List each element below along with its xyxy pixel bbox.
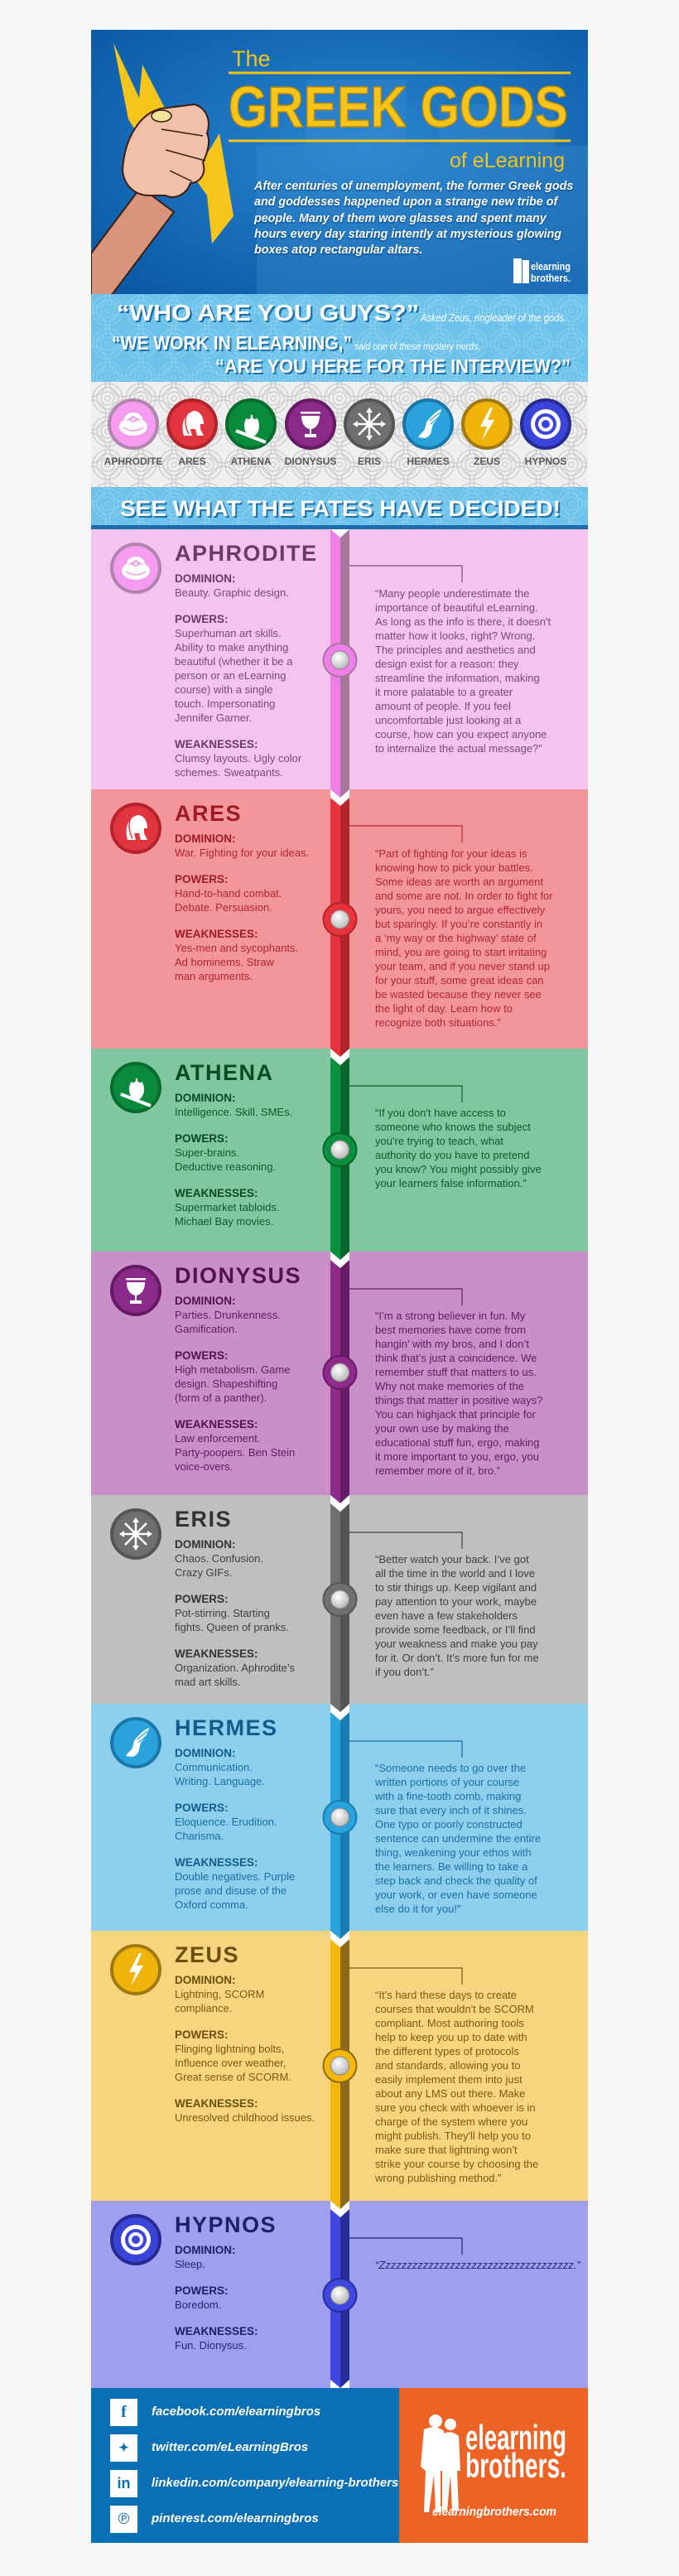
panel: hypnos [91,2201,588,2388]
text: linkedin: linkedin.com/company/elearning-brothers [152,2476,398,2490]
quote: dionysus: hangin’ with my bros, and I don’t [375,1338,529,1350]
quote: ares: be wasted because they never see [375,988,542,1001]
text: aphrodite stats: Ability to make anything [175,641,288,654]
text: eris stats: fights. Queen of pranks. [175,1621,289,1633]
text: ares stats: Yes-men and sycophants. [175,942,298,954]
icon: chaos star [110,1508,161,1560]
text: hypnos stats: Fun. Dionysus. [175,2339,247,2352]
quote: hermes: sentence can undermine the entire [375,1832,541,1845]
text: ares stats: man arguments. [175,970,253,982]
quote: athena [375,1107,542,1189]
text: hypnos stats: Sleep. [175,2258,205,2270]
panel: icon row: ERIS [358,456,381,467]
quote: eris [375,1553,539,1678]
quote: hermes: “Someone needs to go over the [375,1762,526,1774]
text: zeus stats: Influence over weather, [175,2057,286,2069]
icon: pinterest: ℗ [118,2511,129,2528]
quote: ares: and some are not. In order to fight for [375,890,553,902]
text: hermes stats: Charisma. [175,1830,224,1842]
quote: zeus: easily implement them into just [375,2073,522,2086]
text: hypnos stats: DOMINION: [175,2244,235,2256]
text: dionysus stats [175,1295,295,1473]
quote: dionysus: Why not make memories of the [375,1380,524,1392]
text: zeus stats [175,1974,315,2124]
intro text: boxes atop rectangular altars. [254,244,422,257]
quote: aphrodite: uncomfortable just looking at a [375,714,521,726]
quote: zeus [375,1989,538,2184]
text: eris stats: Chaos. Confusion. [175,1552,263,1565]
icon: owl [110,1062,161,1113]
header [91,30,588,294]
panel: eris [91,1495,588,1704]
icon: facebook: f [121,2403,127,2421]
quote: ares [375,847,553,1029]
quote: zeus: wrong publishing method.” [375,2172,501,2184]
icon: linkedin: in [118,2475,131,2492]
quote: ares: for your stuff, some great ideas can [375,974,544,987]
quote: aphrodite: matter how it looks, right? Wrong. [375,630,535,642]
quote: athena: you're trying to teach, what [375,1135,503,1147]
dionysus bar [323,1260,462,1503]
text: aphrodite stats: Beauty. Graphic design. [175,586,289,599]
footer: social links [91,2388,399,2543]
quote: zeus: compliant. Most authoring tools [375,2017,524,2029]
quote: hypnos: “Zzzzzzzzzzzzzzzzzzzzzzzzzzzzzzzzzzzz.” [375,2259,580,2271]
panel: icon row [91,382,588,487]
text: aphrodite stats: POWERS: [175,613,229,625]
quote: hermes: your work, or even have someone [375,1889,537,1901]
text: hermes stats: POWERS: [175,1802,229,1814]
hermes bar [323,1712,462,1939]
eris bar [323,1503,462,1712]
text: aphrodite stats [175,572,301,779]
heading: fates [91,487,588,529]
icon: twitter [110,2434,137,2462]
text: aphrodite stats: person or an eLearning [175,669,286,682]
text: eris stats [175,1538,295,1688]
heading: hypnos: HYPNOS [175,2212,277,2237]
quote: zeus: and standards, allowing you to [375,2059,521,2072]
quote: dionysus: educational stuff fun, ergo, making [375,1436,540,1449]
panel: aphrodite [91,529,588,789]
panel: quotes band: said one of these mystery nerds, [354,340,480,352]
panel: icon row: ATHENA [230,456,272,467]
text: athena stats: Intelligence. Skill. SMEs. [175,1106,292,1118]
quote: zeus: about any LMS out there. Make [375,2087,525,2100]
quote: ares: the light of day. Learn how to [375,1002,513,1015]
heading: hermes: HERMES [175,1715,278,1740]
text: hermes stats: Double negatives. Purple [175,1870,295,1883]
text: eris stats: Pot-stirring. Starting [175,1607,270,1619]
quote: ares: your team, and if you never stand up [375,960,550,972]
icon: fist [91,104,209,295]
text: athena stats: Michael Bay movies. [175,1215,273,1228]
quote: hermes: the learners. Be willing to take a [375,1860,527,1873]
text: dionysus stats: Law enforcement. [175,1432,260,1445]
text: twitter: twitter.com/eLearningBros [152,2440,308,2454]
quote: ares: but sparingly. If you’re constantly in [375,918,542,930]
quote: aphrodite: streamline the information, making [375,672,540,684]
panel: icon row: APHRODITE [104,456,162,467]
quote: hermes: written portions of your course [375,1776,519,1788]
text: zeus stats: POWERS: [175,2028,229,2041]
quote: eris: your weakness and make you pay [375,1638,538,1650]
quote: hermes: step back and check the quality of [375,1874,537,1887]
panel: quotes band [91,294,588,382]
quote: eris: pay attention to your work, maybe [375,1595,537,1608]
quote: aphrodite: importance of beautiful eLearning. [375,601,538,614]
quote: aphrodite [375,587,551,755]
quote: dionysus [375,1310,542,1477]
text: ares stats: Ad hominems. Straw [175,956,274,968]
quote: dionysus: remember more of it, bro.” [375,1464,500,1477]
quote: athena: authority do you have to pretend [375,1149,529,1161]
text: aphrodite stats: beautiful (whether it be a [175,655,292,668]
intro text: people. Many of them wore glasses and spent many [254,212,547,225]
quote: aphrodite: course, how can you expect anyone [375,728,547,740]
text: eris stats: WEAKNESSES: [175,1647,258,1660]
heading: dionysus: DIONYSUS [175,1263,301,1288]
text: dionysus stats: DOMINION: [175,1295,235,1307]
logo: elearning brothers small: elearning [531,260,571,273]
quote: zeus: strike your course by choosing the [375,2158,538,2170]
text: facebook: facebook.com/elearningbros [152,2405,320,2419]
icon: lightning bolt [113,43,234,244]
text: athena stats: Super-brains. [175,1146,239,1159]
text: aphrodite stats: Clumsy layouts. Ugly color [175,752,301,765]
text: eris stats: Crazy GIFs. [175,1566,232,1579]
panel: hermes [91,1704,588,1931]
text: zeus stats: DOMINION: [175,1974,235,1986]
text: hypnos stats: WEAKNESSES: [175,2325,258,2337]
panel: icon row: ARES [178,456,206,467]
text: zeus stats: WEAKNESSES: [175,2097,258,2110]
heading: fates: SEE WHAT THE FATES HAVE DECIDED! [120,496,561,521]
quote: aphrodite: As long as the info is there, it doesn't [375,615,551,628]
text: zeus stats: Great sense of SCORM. [175,2071,291,2083]
text: zeus stats: Unresolved childhood issues. [175,2111,315,2124]
panel: quotes band: Asked Zeus, ringleader of the gods. [420,312,566,324]
text: dionysus stats: Parties. Drunkenness. [175,1309,281,1321]
text: hermes stats [175,1747,295,1911]
heading: ares: ARES [175,801,242,826]
quote: dionysus: “I’m a strong believer in fun. My [375,1310,525,1322]
logo: elearning brothers small: brothers. [531,272,571,284]
text: pinterest: pinterest.com/elearningbros [152,2511,319,2525]
quote: athena: “If you don't have access to [375,1107,506,1119]
heading: aphrodite: APHRODITE [175,541,318,566]
text: athena stats: POWERS: [175,1132,229,1145]
quote: ares: a ‘my way or the highway’ state of [375,932,537,944]
panel: icon row: HYPNOS [525,456,566,467]
quote: ares: knowing how to pick your battles. [375,861,533,874]
text: hermes stats: Oxford comma. [175,1898,248,1911]
quote: athena: someone who knows the subject [375,1121,531,1133]
quote: zeus: charge of the system where you [375,2115,527,2128]
quote: zeus: “It’s hard these days to create [375,1989,517,2001]
quote: zeus: might publish. They'll help you to [375,2130,531,2142]
quote: eris: if you don’t.” [375,1666,434,1678]
icon: rose [110,543,161,594]
title: of eLearning [450,149,565,172]
text: ares stats: WEAKNESSES: [175,928,258,940]
quote: aphrodite: amount of people. If you feel [375,700,511,712]
icon: winged foot [110,1717,161,1768]
ares bar [323,798,462,1057]
zeus bar [323,1939,462,2209]
quote: aphrodite: “Many people underestimate the [375,587,529,600]
icon: twitter: ✦ [118,2441,129,2455]
text: athena stats: Supermarket tabloids. [175,1201,279,1213]
text: aphrodite stats: schemes. Sweatpants. [175,766,283,779]
icon: goblet [110,1265,161,1316]
panel: icon row: ZEUS [474,456,500,467]
quote: hermes: One typo or poorly constructed [375,1818,522,1831]
text: eris stats: Organization. Aphrodite’s [175,1662,295,1674]
panel: ares [91,789,588,1049]
text: zeus stats: compliance. [175,2002,232,2014]
quote: dionysus: You can highjack that principle for [375,1408,536,1421]
text: aphrodite stats: touch. Impersonating [175,697,275,710]
panel: quotes band: “ARE YOU HERE FOR THE INTERVIEW?” [215,355,571,377]
icon: pinterest [110,2506,137,2533]
intro text: and goddesses happened upon a strange new tribe of [254,195,557,209]
text: ares stats: War. Fighting for your ideas. [175,847,309,859]
quote: ares: “Part of fighting for your ideas is [375,847,527,860]
text: hypnos stats: POWERS: [175,2284,229,2297]
text: dionysus stats: voice-overs. [175,1460,233,1473]
panel: icon row: HERMES [407,456,450,467]
hypnos bar [323,2209,462,2388]
quote: zeus: make sure that lightning won't [375,2144,518,2156]
text: dionysus stats: High metabolism. Game [175,1363,290,1376]
text: dionysus stats: POWERS: [175,1349,229,1362]
icon: facebook [110,2399,137,2426]
text: athena stats: Deductive reasoning. [175,1160,276,1173]
quote: athena: your learners false information.” [375,1177,527,1189]
text: aphrodite stats: WEAKNESSES: [175,738,258,750]
text: ares stats: Debate. Persuasion. [175,901,272,914]
text: dionysus stats: design. Shapeshifting [175,1377,277,1390]
text: eris stats: POWERS: [175,1593,229,1605]
quote: eris: all the time in the world and I love [375,1567,535,1580]
text: hermes stats: Eloquence. Erudition. [175,1816,277,1828]
panel: zeus [91,1931,588,2201]
quote: ares: mind, you are going to start irritating [375,946,547,958]
text: hermes stats: Communication. [175,1761,253,1773]
quote: zeus: sure you check with whoever is in [375,2101,536,2114]
athena bar [323,1057,462,1260]
icon: helmet [110,803,161,854]
text: athena stats: DOMINION: [175,1092,235,1104]
quote: zeus: courses that wouldn't be SCORM [375,2003,534,2015]
heading: athena: ATHENA [175,1060,273,1085]
text: zeus stats: Flinging lightning bolts, [175,2043,284,2055]
logo: elearning brothers small [513,258,571,284]
quote: dionysus: remember stuff that matters to us. [375,1366,537,1378]
heading: zeus: ZEUS [175,1942,239,1967]
quote: ares: Some ideas are worth an argument [375,876,543,888]
quote: ares: recognize both situations.” [375,1016,501,1029]
text: hermes stats: prose and disuse of the [175,1884,287,1897]
quote: hermes [375,1762,541,1915]
footer: logo: elearningbrothers.com [432,2505,556,2519]
icon: linkedin [110,2470,137,2497]
text: ares stats: Hand-to-hand combat. [175,887,282,900]
text: eris stats: mad art skills. [175,1676,240,1688]
quote: dionysus: think that’s just a coincidence. We [375,1352,537,1364]
text: ares stats [175,832,309,982]
quote: zeus: the different types of protocols [375,2045,519,2057]
text: zeus stats: Lightning, SCORM [175,1988,264,2000]
text: aphrodite stats: Superhuman art skills. [175,627,282,639]
quote: aphrodite: The principles and aesthetics and [375,644,536,656]
quote: hermes: sure that every inch of it shines. [375,1804,527,1816]
heading: eris: ERIS [175,1507,232,1532]
text: hermes stats: DOMINION: [175,1747,235,1759]
text: hypnos stats [175,2244,258,2352]
quote: dionysus: it more important to you, ergo, you [375,1450,539,1463]
icon: target [110,2214,161,2265]
panel: quotes band: “WE WORK IN ELEARNING,” [112,332,352,354]
quote: dionysus: your own use by making the [375,1422,509,1435]
text: dionysus stats: Gamification. [175,1323,238,1335]
text: dionysus stats: (form of a panther). [175,1392,267,1404]
quote: athena: you know? You might possibly give [375,1163,542,1175]
quote: hermes: else do it for you!” [375,1903,460,1915]
text: ares stats: POWERS: [175,873,229,885]
intro text [253,180,573,258]
title: The [232,46,271,71]
quote: hermes: with a fine-tooth comb, making [375,1790,521,1802]
icon: lightning [110,1944,161,1995]
text: dionysus stats: WEAKNESSES: [175,1418,258,1430]
quote: aphrodite: design exist for a reason: they [375,658,518,670]
text: aphrodite stats: Jennifer Garner. [175,712,252,724]
quote: aphrodite: it more palatable to a greater [375,686,513,698]
panel: athena [91,1049,588,1252]
text: eris stats: DOMINION: [175,1538,235,1551]
quote: dionysus: best memories have come from [375,1324,526,1336]
text: aphrodite stats: course) with a single [175,683,273,696]
text: aphrodite stats: DOMINION: [175,572,235,585]
quote: eris: for it. Or don’t. It’s more fun for me [375,1652,539,1664]
text: athena stats: WEAKNESSES: [175,1187,258,1199]
quote: dionysus: things that matter in positive ways? [375,1394,542,1406]
quote: eris: provide some feedback, or I’ll find [375,1623,536,1636]
quote: eris: to stir things up. Keep vigilant and [375,1581,537,1594]
aphrodite bar [323,529,462,798]
text: ares stats: DOMINION: [175,832,235,845]
text: hermes stats: Writing. Language. [175,1775,265,1787]
panel: dionysus [91,1252,588,1495]
quote: hermes: thing, weakening your ethos with [375,1846,532,1859]
text: athena stats [175,1092,292,1228]
text: hypnos stats: Boredom. [175,2299,221,2311]
quote: eris: even have a few stakeholders [375,1609,518,1622]
quote: aphrodite: to internalize the actual message?” [375,742,542,755]
panel: quotes band: “WHO ARE YOU GUYS?” [117,300,419,326]
quote: eris: “Better watch your back. I’ve got [375,1553,529,1565]
text: hermes stats: WEAKNESSES: [175,1856,258,1869]
quote: ares: yours, you need to argue effectively [375,904,545,916]
text: dionysus stats: Party-poopers. Ben Stein [175,1446,295,1459]
title [229,46,571,172]
intro text: hours every day staring intently at mysterious glowing [254,228,561,241]
footer: logo [399,2388,588,2543]
panel: icon row: DIONYSUS [285,456,336,467]
intro text: After centuries of unemployment, the former Greek gods [254,180,573,193]
quote: zeus: help to keep you up to date with [375,2031,527,2043]
